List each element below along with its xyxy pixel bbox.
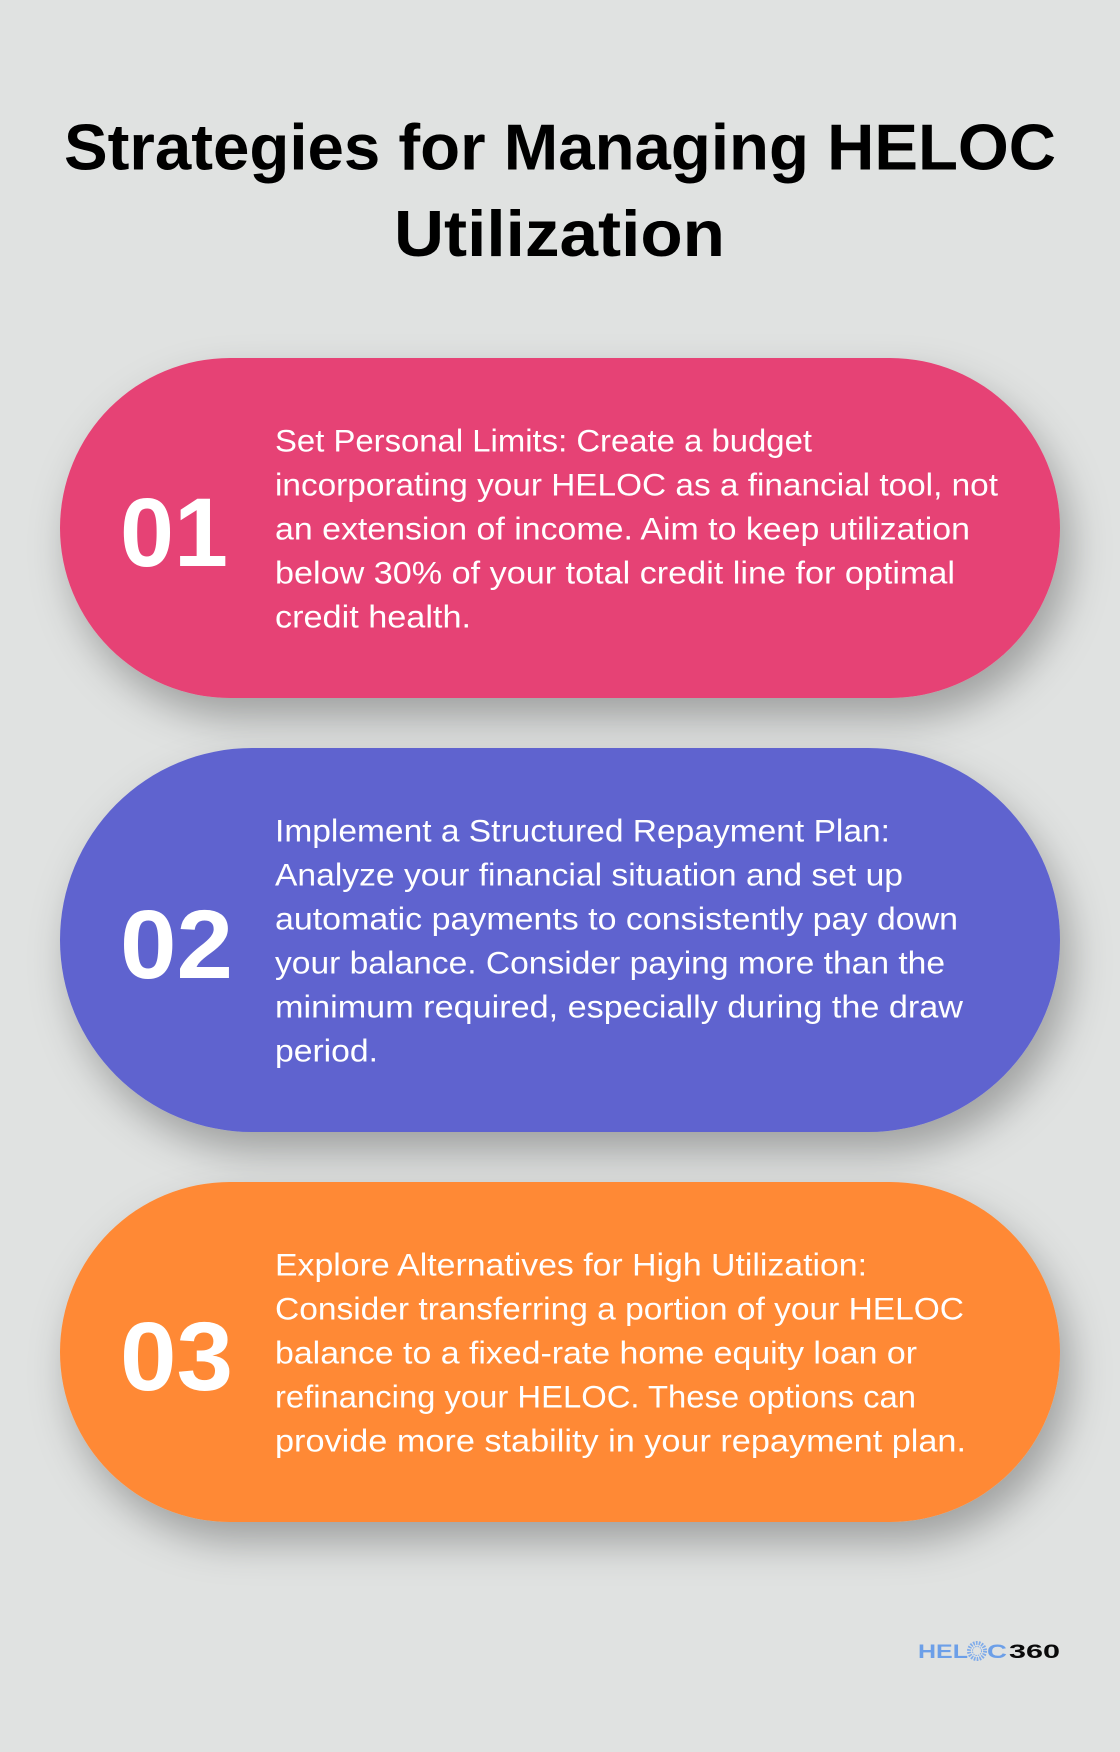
number 03: 03 (120, 1302, 233, 1411)
text block: structured repayment plan: your balance. Consider paying more than the (275, 944, 945, 980)
text block: alternatives for high utilization: Explore Alternatives for High Utilization: (275, 1246, 867, 1282)
text block: set personal limits: incorporating your HELOC as a financial tool, not (275, 466, 998, 502)
logo: HELOC360: C (987, 1642, 1007, 1663)
text block: alternatives for high utilization: Consider transferring a portion of your HELOC (275, 1290, 964, 1326)
text block: alternatives for high utilization: refinancing your HELOC. These options can (275, 1378, 916, 1414)
text block: set personal limits: an extension of income. Aim to keep utilization (275, 510, 970, 546)
text block: structured repayment plan: Analyze your financial situation and set up (275, 856, 903, 892)
title (64, 110, 1056, 270)
panel: step 03 alternatives for high utilization (60, 1182, 1060, 1522)
number 02: 02 (120, 890, 233, 999)
panel: step 01 set personal limits (60, 358, 1060, 698)
text block: structured repayment plan (275, 812, 963, 1068)
text block: set personal limits: Set Personal Limits: Create a budget (275, 422, 812, 458)
text block: alternatives for high utilization: balance to a fixed-rate home equity loan or (275, 1334, 917, 1370)
pill background pink (60, 358, 1060, 698)
text block: structured repayment plan: period. (275, 1032, 378, 1068)
text block: set personal limits (275, 422, 998, 634)
icon: radial ring letter O (969, 1643, 985, 1659)
logo: HELOC360: 360 (1009, 1642, 1060, 1663)
logo: HELOC360: HEL (918, 1642, 969, 1663)
text block: set personal limits: credit health. (275, 598, 471, 634)
panel: step 02 structured repayment plan (60, 748, 1060, 1132)
text block: structured repayment plan: minimum required, especially during the draw (275, 988, 963, 1024)
number 01: 01 (120, 478, 228, 587)
pill background indigo (60, 748, 1060, 1132)
text block: structured repayment plan: Implement a Structured Repayment Plan: (275, 812, 890, 848)
text block: set personal limits: below 30% of your total credit line for optimal (275, 554, 955, 590)
pill background orange (60, 1182, 1060, 1522)
logo: HELOC360 (918, 1642, 1060, 1663)
title: Strategies for Managing HELOC (64, 110, 1056, 184)
text block: alternatives for high utilization (275, 1246, 966, 1458)
title: Utilization (394, 197, 725, 270)
text block: structured repayment plan: automatic payments to consistently pay down (275, 900, 958, 936)
text block: alternatives for high utilization: provide more stability in your repayment plan. (275, 1422, 966, 1458)
